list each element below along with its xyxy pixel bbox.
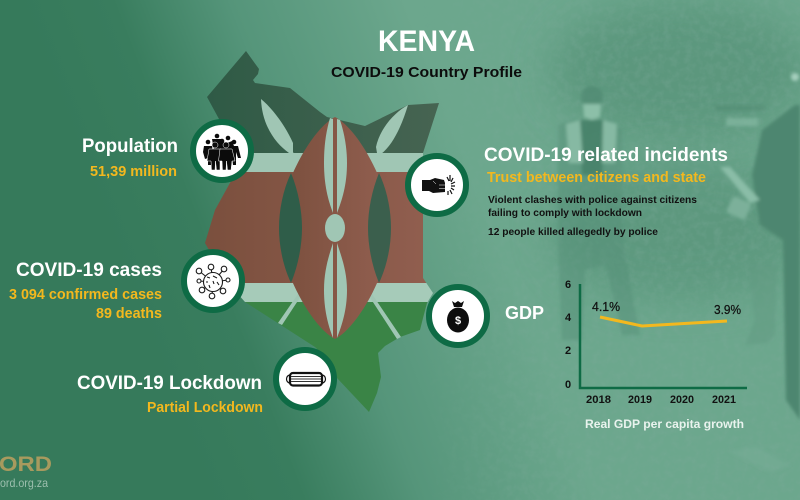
- map: green lower band: [245, 302, 428, 412]
- incidents text block: failing to comply with lockdown: [488, 207, 642, 219]
- subtitle: COVID-19 Country Profile: [331, 64, 522, 81]
- incidents text block: [484, 145, 728, 238]
- map of Kenya with flag shield: [200, 45, 445, 417]
- GDP label: GDP: [505, 303, 544, 323]
- cases text: 3 094 confirmed cases: [9, 287, 162, 303]
- icon: money bag: $: [455, 315, 461, 327]
- cases text: COVID-19 cases: [16, 260, 162, 281]
- chart axes: [580, 284, 747, 388]
- incidents text block: 12 people killed allegedly by police: [488, 226, 658, 238]
- cases text: [9, 260, 162, 322]
- officer left: [558, 120, 640, 340]
- shield: [279, 117, 391, 339]
- title: KENYA: [378, 25, 475, 58]
- map: light upper band: [246, 153, 423, 172]
- incidents text block: Violent clashes with police against citizens: [488, 194, 697, 206]
- logo: [0, 453, 52, 490]
- map: brown middle band: [200, 172, 440, 283]
- logo: ORD: [0, 453, 52, 476]
- lockdown text: [77, 373, 263, 416]
- chart y tick labels: [565, 279, 572, 391]
- chart y tick labels: 2: [565, 345, 571, 357]
- cases text: 89 deaths: [96, 306, 162, 322]
- chart value label 2018: 4.1%: [592, 300, 620, 314]
- icon: virus: [184, 252, 242, 310]
- chart x tick labels: 2021: [712, 394, 736, 406]
- chart x tick labels: [586, 394, 736, 406]
- logo: ord.org.za: [0, 476, 48, 490]
- map: dark upper band: [207, 51, 439, 153]
- chart value label 2021: 3.9%: [714, 303, 741, 317]
- icon: money bag: [429, 287, 487, 345]
- background photo: police officers on a road: [553, 0, 800, 418]
- officer right: [752, 105, 800, 420]
- icon: fist: [408, 156, 466, 214]
- incidents text block: Trust between citizens and state: [487, 170, 706, 186]
- population text: [82, 136, 178, 180]
- icon: face mask: [276, 350, 334, 408]
- population text: Population: [82, 136, 178, 157]
- shield: dark side lenses: [279, 173, 302, 283]
- shield: white spindles: [324, 118, 347, 338]
- icon: people: [193, 122, 251, 180]
- spears: [261, 99, 408, 339]
- chart y tick labels: 4: [565, 312, 572, 324]
- hut / wall: [726, 118, 758, 126]
- map: light lower band: [240, 283, 433, 302]
- chart line: [600, 317, 727, 326]
- chart y tick labels: 6: [565, 279, 571, 291]
- population text: 51,39 million: [90, 164, 177, 180]
- rear legs of right officer: [745, 263, 777, 345]
- chart x tick labels: 2020: [670, 394, 694, 406]
- lockdown text: Partial Lockdown: [147, 400, 263, 416]
- chart y tick labels: 0: [565, 379, 571, 391]
- incidents text block: COVID-19 related incidents: [484, 145, 728, 166]
- lockdown text: COVID-19 Lockdown: [77, 373, 262, 394]
- chart x tick labels: 2018: [586, 394, 611, 406]
- chart caption: Real GDP per capita growth: [585, 417, 744, 431]
- line chart: real GDP per capita growth: [565, 279, 747, 431]
- chart x tick labels: 2019: [628, 394, 652, 406]
